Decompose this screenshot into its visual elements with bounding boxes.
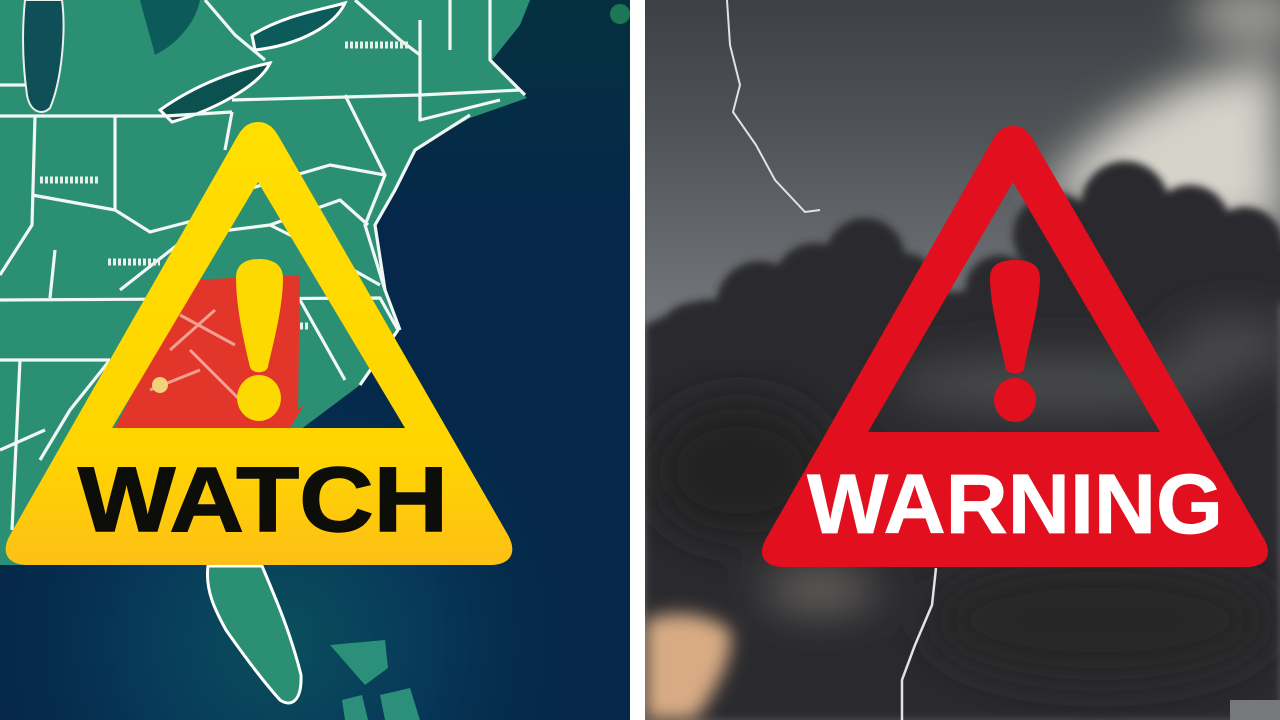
lightning bolts <box>727 0 936 720</box>
bright cloud break <box>1040 0 1280 230</box>
map: eastern United States land <box>0 0 630 720</box>
mid-level cloud shading <box>650 317 1280 680</box>
text: WATCH: WATCH <box>78 449 448 551</box>
icon: watch exclamation mark <box>236 259 283 421</box>
map: Great Lakes <box>23 0 64 112</box>
text: WARNING: WARNING <box>807 457 1223 551</box>
map: Caribbean islands <box>330 640 420 720</box>
panel: warning storm sky <box>645 0 1280 720</box>
storm clouds <box>645 161 1280 720</box>
map: Florida <box>207 566 301 703</box>
icon: warning triangle sign <box>762 126 1268 567</box>
map: state name labels <box>40 45 408 326</box>
panel: watch map <box>0 0 630 720</box>
map: red watch area <box>115 275 305 428</box>
icon: watch triangle sign <box>6 122 512 565</box>
map: state borders <box>0 0 525 530</box>
icon: warning exclamation mark <box>990 260 1040 422</box>
sunset glow <box>645 614 731 720</box>
